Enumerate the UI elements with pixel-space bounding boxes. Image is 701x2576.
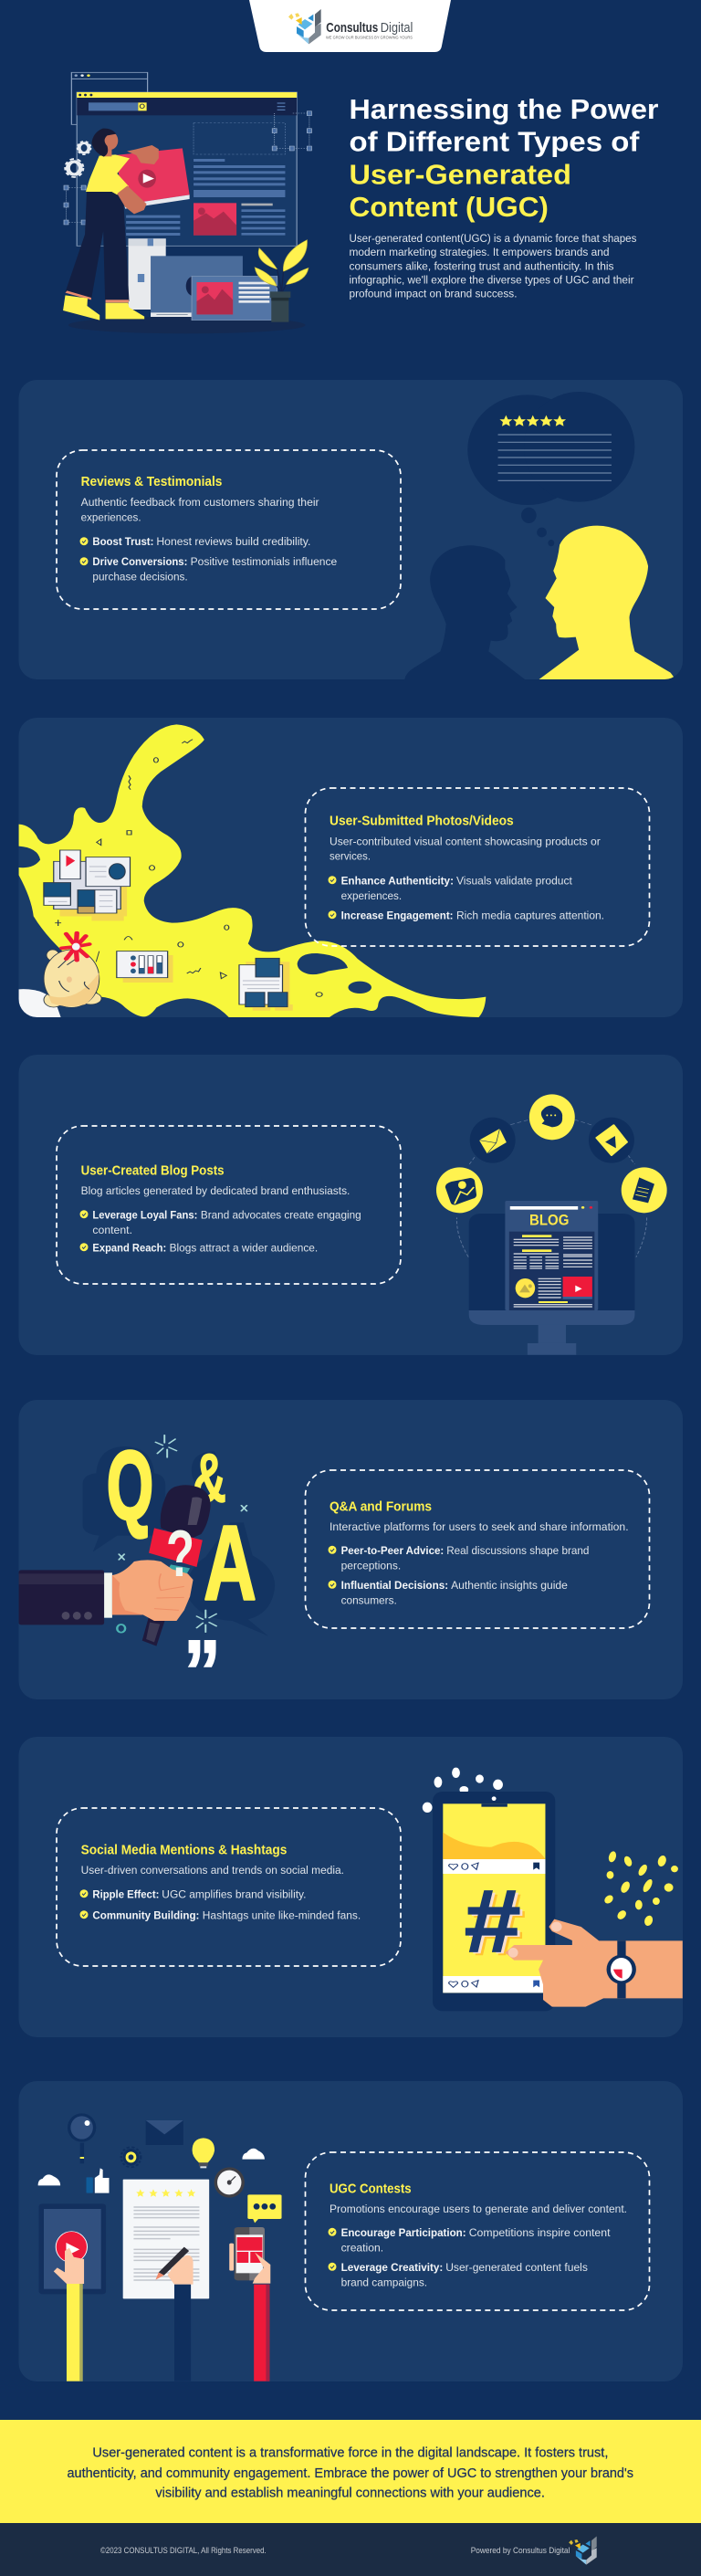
illustration: phone with hashtag and hand xyxy=(423,1768,683,2011)
intro paragraph: infographic, we'll explore the diverse types of UGC and their xyxy=(349,274,633,287)
icon: envelope circle xyxy=(470,1118,516,1163)
icon: image circle xyxy=(436,1167,483,1213)
card: photos and videos text: User-Submitted Photos/Videos xyxy=(330,813,514,828)
card: reviews text: experiences. xyxy=(81,511,141,524)
document with images xyxy=(239,958,293,1011)
card: reviews text: Honest reviews build credibility. xyxy=(156,535,310,548)
card: reviews text: Authentic feedback from customers sharing their xyxy=(81,496,319,509)
closing yellow band: User-generated content is a transformative force in the digital landscape. It fosters trust, xyxy=(92,2445,608,2461)
plant xyxy=(255,240,309,322)
media card cluster xyxy=(44,850,131,920)
panel: social media mentions and hashtags xyxy=(18,1737,683,2037)
card: Q&A text: consumers. xyxy=(341,1594,397,1607)
card: reviews text: Positive testimonials influence xyxy=(191,555,337,568)
card: reviews text: Drive Conversions: xyxy=(92,555,187,568)
card: Q&A text: perceptions. xyxy=(341,1560,401,1572)
card: reviews text: Reviews & Testimonials xyxy=(81,474,222,489)
card: contests text: brand campaigns. xyxy=(341,2276,427,2288)
logo tab: Consultus xyxy=(326,20,378,36)
letters: & xyxy=(193,1440,226,1518)
card: blog posts text: content. xyxy=(92,1224,132,1236)
intro paragraph: consumers alike, fostering trust and authenticity. In this xyxy=(349,259,613,272)
logo tab xyxy=(249,0,451,52)
sliders card xyxy=(117,952,173,983)
intro paragraph: User-generated content(UGC) is a dynamic force that shapes xyxy=(349,232,636,245)
card: reviews text xyxy=(57,450,401,609)
hashtag: # xyxy=(463,1871,519,1971)
card: blog posts text: Blog articles generated by dedicated brand enthusiasts. xyxy=(81,1184,350,1197)
panel: Q&A and forums xyxy=(18,1400,683,1724)
intro paragraph: modern marketing strategies. It empowers brands and xyxy=(349,246,610,258)
icon: document circle xyxy=(622,1167,667,1213)
icons: post actions xyxy=(449,1863,478,1987)
title: Content (UGC) xyxy=(349,191,549,223)
card: blog posts text: Blogs attract a wider audience. xyxy=(170,1241,318,1254)
card: blog posts text: Leverage Loyal Fans: xyxy=(92,1208,197,1221)
sparkles xyxy=(117,1435,246,1633)
tablet with video and yellow arm xyxy=(39,2203,106,2381)
card: social media text: Community Building: xyxy=(92,1908,199,1921)
card: contests text: Competitions inspire content xyxy=(469,2226,611,2239)
hashtag: # xyxy=(466,1873,523,1972)
card: Q&A text xyxy=(305,1470,650,1628)
card: social media text: Hashtags unite like-minded fans. xyxy=(203,1908,361,1921)
card: Q&A text: Real discussions shape brand xyxy=(446,1544,590,1557)
card: social media text: Ripple Effect: xyxy=(92,1887,159,1900)
card: reviews text: Boost Trust: xyxy=(92,535,153,548)
illustration: hands with tablet, document and phone xyxy=(38,2113,282,2381)
hero illustration: person with browser window xyxy=(63,72,311,333)
icon: clock xyxy=(214,2167,245,2198)
panel: user-created blog posts xyxy=(18,1055,683,1355)
card: reviews text: purchase decisions. xyxy=(92,571,188,584)
card: contests text xyxy=(305,2152,650,2310)
card: social media text xyxy=(57,1808,401,1966)
card: contests text: creation. xyxy=(341,2241,383,2254)
card: contests text: Encourage Participation: xyxy=(341,2226,466,2239)
letters xyxy=(108,1449,256,1601)
card: photos and videos text: Increase Engagement: xyxy=(341,909,453,921)
card: photos and videos text: Visuals validate product xyxy=(456,874,572,887)
hashtag xyxy=(466,1890,525,1956)
closing yellow band: visibility and establish meaningful connections with your audience. xyxy=(155,2486,545,2501)
packages xyxy=(129,238,277,321)
card: Q&A text: Peer-to-Peer Advice: xyxy=(341,1544,444,1557)
card: social media text: UGC amplifies brand visibility. xyxy=(162,1887,307,1900)
title xyxy=(349,93,659,223)
hashtag: # xyxy=(468,1875,525,1974)
logo tab: Digital xyxy=(381,20,413,36)
card: Q&A text: Authentic insights guide xyxy=(451,1579,568,1592)
intro paragraph: profound impact on brand success. xyxy=(349,287,517,300)
phone and red arm xyxy=(229,2227,270,2381)
card: photos and videos text: services. xyxy=(330,850,371,863)
title: User-Generated xyxy=(349,158,571,190)
baby head xyxy=(19,933,101,1017)
footer: ©2023 CONSULTUS DIGITAL, All Rights Reserved. xyxy=(100,2546,267,2555)
illustration: blog monitor with icons xyxy=(436,1094,667,1355)
letters: A xyxy=(204,1503,256,1622)
icon: footer logo xyxy=(569,2537,597,2565)
illustration: yellow splash with media cards xyxy=(19,724,486,1017)
illustration: Q&A microphone xyxy=(18,1435,275,1667)
closing yellow band: authenticity, and community engagement. Embrace the power of UGC to strengthen your brand's xyxy=(68,2466,633,2481)
card: photos and videos text: Rich media captures attention. xyxy=(456,909,604,921)
footer xyxy=(0,2523,701,2576)
card: contests text: Leverage Creativity: xyxy=(341,2261,443,2274)
card: blog posts text: Expand Reach: xyxy=(92,1241,166,1254)
closing quote mark: ” xyxy=(183,1622,221,1724)
card: blog posts text: Brand advocates create engaging xyxy=(201,1208,361,1221)
hand with watch xyxy=(505,1919,683,2007)
title: Harnessing the Power xyxy=(349,93,659,125)
card: Q&A text: Influential Decisions: xyxy=(341,1579,448,1592)
card: Q&A text: Q&A and Forums xyxy=(330,1498,432,1514)
card: contests text: User-generated content fuels xyxy=(445,2261,588,2274)
icon: video circle xyxy=(589,1118,634,1163)
card: contests text: UGC Contests xyxy=(330,2181,412,2196)
card: social media text: User-driven conversations and trends on social media. xyxy=(81,1864,344,1877)
closing yellow band xyxy=(0,2420,701,2523)
icon: chat bubble xyxy=(247,2194,282,2223)
icon: light bulb xyxy=(193,2138,214,2168)
microphone xyxy=(142,1485,211,1646)
sleeve and hand xyxy=(19,1560,194,1624)
icon: thumbs up xyxy=(87,2168,109,2193)
monitor label: BLOG xyxy=(529,1213,569,1229)
review document and writing hand xyxy=(123,2180,209,2381)
panel: UGC contests xyxy=(18,2081,683,2381)
doodles xyxy=(55,740,322,996)
icon: gears xyxy=(65,142,90,177)
illustration: two heads with thought bubble xyxy=(404,392,675,679)
card: photos and videos text: User-contributed visual content showcasing products or xyxy=(330,835,601,847)
card: Q&A text: Interactive platforms for users to seek and share information. xyxy=(330,1520,629,1533)
icon: logo cube xyxy=(288,9,321,44)
card: photos and videos text: experiences. xyxy=(341,889,402,902)
icon: envelope xyxy=(146,2120,183,2145)
card: photos and videos text xyxy=(305,788,650,946)
panel: user-submitted photos and videos xyxy=(18,718,683,1017)
card: photos and videos text: Enhance Authenticity: xyxy=(341,874,454,887)
icon: gear xyxy=(121,2147,141,2167)
letters: Q xyxy=(107,1432,153,1540)
logo tab: WE GROW OUR BUSINESS BY GROWING YOURS xyxy=(326,35,413,40)
card: blog posts text xyxy=(57,1126,401,1284)
card: blog posts text: User-Created Blog Posts xyxy=(81,1162,225,1178)
icon: clouds xyxy=(38,2149,265,2185)
icon: magnifier xyxy=(68,2113,96,2163)
icon: chat circle xyxy=(529,1094,575,1140)
intro paragraph xyxy=(349,232,636,300)
person holding video folder xyxy=(63,129,190,321)
card: social media text: Social Media Mentions & Hashtags xyxy=(81,1842,287,1857)
panel: reviews and testimonials xyxy=(18,380,683,679)
card: contests text: Promotions encourage users to generate and deliver content. xyxy=(330,2203,627,2215)
question mark: ? xyxy=(166,1518,194,1591)
title: of Different Types of xyxy=(349,126,640,158)
footer: Powered by Consultus Digital xyxy=(471,2546,570,2555)
